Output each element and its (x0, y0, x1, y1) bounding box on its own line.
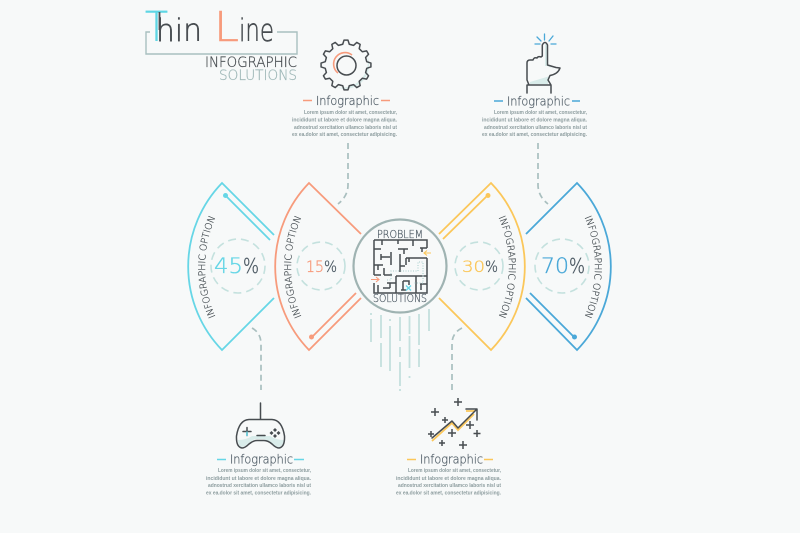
text block: bottom right option: Lorem ipsum dolor sit amet, consectetur, (408, 468, 502, 474)
panel: 15% orange wedge: INFOGRAPHIC OPTION (284, 216, 302, 318)
icon: game controller (236, 403, 285, 448)
text block: bottom right option: incididunt ut labore et dolore magna aliqua. (396, 476, 502, 482)
decorative streaks below circle (371, 309, 429, 391)
text block: bottom left option: Lorem ipsum dolor sit amet, consectetur, (218, 468, 312, 474)
panel: 15% orange wedge: 15 (306, 257, 324, 276)
text block: bottom left option: incididunt ut labore et dolore magna aliqua. (206, 476, 312, 482)
connector: bottom right (452, 328, 462, 390)
title: ine (239, 13, 274, 49)
text block: top right option: Infographic (507, 94, 570, 108)
panel: 15% orange wedge (274, 182, 362, 352)
panel: 45% cyan wedge: INFOGRAPHIC OPTION (198, 216, 216, 318)
maze entry arrow (371, 277, 379, 282)
maze dotted path (387, 262, 423, 283)
text block: top left option: incididunt ut labore et dolore magna aliqua. (292, 118, 398, 124)
icon: gear (321, 40, 371, 90)
text block: top right option: ex ea.dolor sit amet, consectetur adipisicing. (482, 132, 588, 138)
icon: growth chart with stars (428, 398, 480, 449)
text block: top left option: Infographic (316, 93, 379, 108)
panel: 45% cyan wedge (187, 182, 275, 352)
text block: bottom left option (206, 452, 312, 496)
center circle: problem solutions maze: PROBLEM (377, 229, 423, 241)
maze x mark (406, 286, 411, 290)
panel: 70% blue wedge: % (569, 254, 585, 278)
title (145, 3, 297, 84)
text block: bottom right option: Infographic (420, 452, 483, 466)
text block: top right option: incididunt ut labore et dolore magna aliqua. (482, 118, 588, 124)
text block: top right option: Lorem ipsum dolor sit amet, consectetur, (494, 110, 588, 116)
center circle: problem solutions maze: SOLUTIONS (373, 293, 427, 305)
panel: 45% cyan wedge: 45 (214, 254, 243, 278)
center circle: problem solutions maze (354, 220, 446, 312)
text block: bottom left option: Infographic (230, 452, 293, 466)
text block: bottom left option: ex ea.dolor sit amet, consectetur adipisicing. (206, 490, 312, 496)
panel: 15% orange wedge: % (324, 257, 337, 276)
panel: 70% blue wedge: 70 (541, 254, 569, 278)
icon: pointing hand (527, 34, 560, 93)
text block: bottom right option: adnostrud xercitation ullamco laboris nisl ut (398, 483, 501, 489)
panel: 30% yellow wedge: INFOGRAPHIC OPTION (498, 216, 516, 318)
connector: top right (538, 143, 548, 204)
connector: bottom left (252, 328, 261, 390)
text block: top right option (482, 94, 588, 138)
title: hin (156, 13, 202, 49)
text block: top left option (292, 93, 398, 138)
panel: 30% yellow wedge (438, 182, 526, 352)
text block: top left option: Lorem ipsum dolor sit amet, consectetur, (304, 110, 398, 116)
panel: 30% yellow wedge: % (485, 257, 498, 276)
text block: bottom left option: adnostrud xercitation ullamco laboris nisl ut (208, 483, 311, 489)
text block: top right option: adnostrud xercitation ullamco laboris nisl ut (484, 125, 587, 131)
title: T (145, 3, 168, 51)
title: SOLUTIONS (219, 68, 297, 84)
panel: 30% yellow wedge: 30 (462, 257, 485, 276)
panel: 70% blue wedge: INFOGRAPHIC OPTION (584, 216, 602, 318)
text block: top left option: ex ea.dolor sit amet, consectetur adipisicing. (292, 132, 398, 138)
maze yellow arrow (424, 250, 431, 256)
text block: top left option: adnostrud xercitation ullamco laboris nisl ut (294, 125, 397, 131)
title: L (214, 3, 239, 51)
maze walls (374, 240, 427, 293)
panel: 70% blue wedge (525, 182, 612, 352)
text block: bottom right option: ex ea.dolor sit amet, consectetur adipisicing. (396, 490, 502, 496)
title: INFOGRAPHIC (205, 55, 297, 71)
panel: 45% cyan wedge: % (243, 254, 259, 278)
connector: top left (338, 143, 348, 204)
text block: bottom right option (396, 452, 502, 496)
